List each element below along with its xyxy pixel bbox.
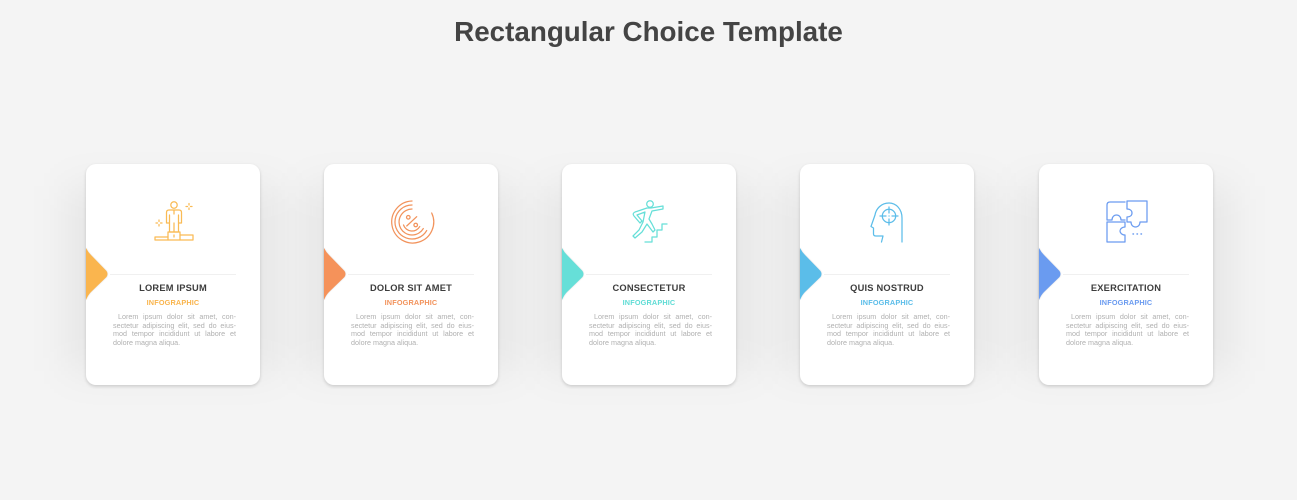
- heading: LOREM IPSUM: [139, 283, 207, 293]
- body text: dolore magna aliqua.: [113, 338, 180, 347]
- body text: [589, 312, 712, 347]
- heading: CONSECTETUR: [613, 283, 685, 293]
- panel: consectetur: [562, 164, 736, 385]
- arrow tab: [800, 248, 822, 300]
- heading: QUIS NOSTRUD: [850, 283, 924, 293]
- panel: dolor sit amet: [324, 164, 498, 385]
- arrow tab: [324, 248, 346, 300]
- body text: [113, 312, 236, 347]
- panel: quis nostrud: [800, 164, 974, 385]
- panel: exercitation: [1039, 164, 1213, 385]
- body text: sectetur adipiscing elit, sed do eius-: [113, 321, 236, 330]
- body text: Lorem ipsum dolor sit amet, con-: [356, 312, 474, 321]
- body text: [351, 312, 474, 347]
- arrow tab: [1038, 248, 1061, 300]
- panel: lorem ipsum: [86, 164, 260, 385]
- body text: Lorem ipsum dolor sit amet, con-: [1071, 312, 1189, 321]
- subheading: INFOGRAPHIC: [147, 298, 199, 306]
- body text: Lorem ipsum dolor sit amet, con-: [832, 312, 950, 321]
- body text: sectetur adipiscing elit, sed do eius-: [351, 321, 474, 330]
- body text: mod tempor incididunt ut labore et: [589, 329, 712, 338]
- heading: DOLOR SIT AMET: [370, 283, 452, 293]
- arrow tab: [86, 248, 108, 300]
- icon: person on podium: [154, 201, 194, 241]
- subheading: INFOGRAPHIC: [1100, 298, 1152, 306]
- subheading: INFOGRAPHIC: [861, 298, 913, 306]
- arrow tab: [562, 248, 584, 300]
- body text: Lorem ipsum dolor sit amet, con-: [118, 312, 236, 321]
- subheading: INFOGRAPHIC: [385, 298, 437, 306]
- icon: percent rings: [391, 200, 434, 244]
- body text: [1066, 312, 1189, 347]
- icon: puzzle pieces: [1106, 200, 1148, 243]
- body text: [827, 312, 950, 347]
- heading: EXERCITATION: [1091, 283, 1161, 293]
- body text: mod tempor incididunt ut labore et: [113, 329, 236, 338]
- body text: dolore magna aliqua.: [351, 338, 418, 347]
- body text: mod tempor incididunt ut labore et: [827, 329, 950, 338]
- icon: head with target: [870, 202, 903, 243]
- body text: dolore magna aliqua.: [1066, 338, 1133, 347]
- icon: runner on stairs: [632, 200, 668, 243]
- title: Rectangular Choice Template: [454, 16, 843, 47]
- body text: Lorem ipsum dolor sit amet, con-: [594, 312, 712, 321]
- body text: dolore magna aliqua.: [827, 338, 894, 347]
- body text: sectetur adipiscing elit, sed do eius-: [1066, 321, 1189, 330]
- body text: mod tempor incididunt ut labore et: [1066, 329, 1189, 338]
- subheading: INFOGRAPHIC: [623, 298, 675, 306]
- body text: dolore magna aliqua.: [589, 338, 656, 347]
- body text: sectetur adipiscing elit, sed do eius-: [827, 321, 950, 330]
- body text: mod tempor incididunt ut labore et: [351, 329, 474, 338]
- body text: sectetur adipiscing elit, sed do eius-: [589, 321, 712, 330]
